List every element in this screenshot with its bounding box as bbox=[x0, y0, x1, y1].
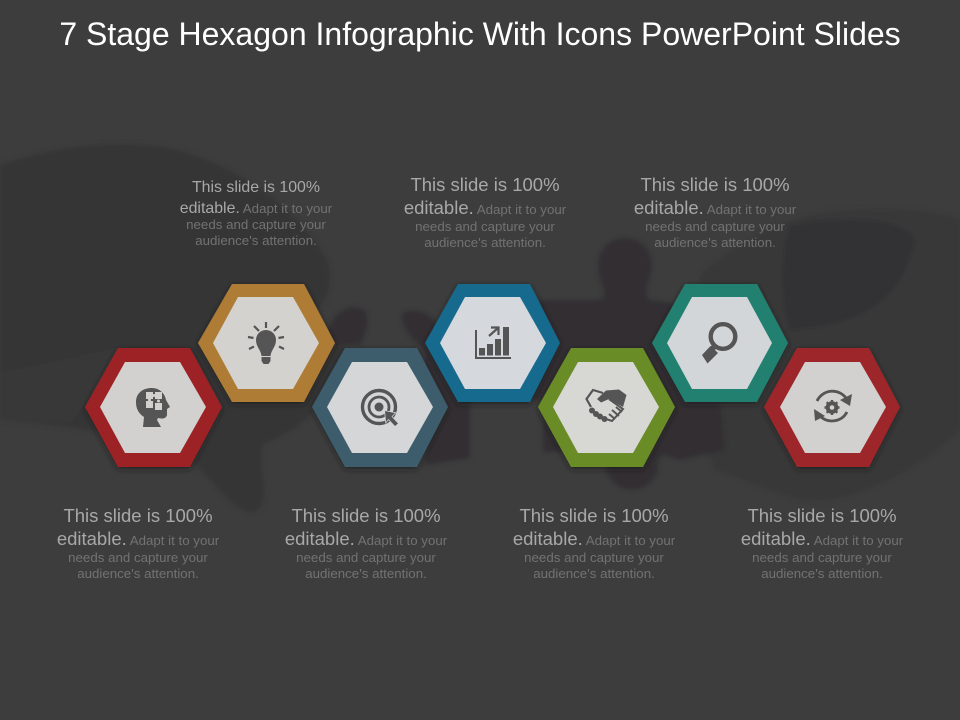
text block: bottom 1: needs and capture your bbox=[68, 550, 208, 565]
text block: top left bbox=[180, 179, 332, 248]
text block: top right: This slide is 100% bbox=[640, 174, 790, 195]
text block: top left: audience's attention. bbox=[195, 233, 317, 248]
text block: top center: needs and capture your bbox=[415, 219, 555, 234]
text block: top right: audience's attention. bbox=[654, 235, 776, 250]
text block: bottom 3: editable. Adapt it to your bbox=[513, 528, 675, 549]
icon: magnifying glass bbox=[702, 324, 735, 364]
text block: bottom 3: audience's attention. bbox=[533, 566, 655, 581]
text block: bottom 1: This slide is 100% bbox=[63, 505, 213, 526]
text block: top right bbox=[634, 174, 796, 250]
text block: top left: This slide is 100% bbox=[192, 179, 320, 196]
text block: top center bbox=[404, 174, 566, 250]
text block: top center: This slide is 100% bbox=[410, 174, 560, 195]
icon: light bulb bbox=[248, 322, 284, 364]
text block: top center: editable. Adapt it to your bbox=[404, 197, 566, 218]
icon: head with puzzle brain bbox=[136, 388, 170, 427]
text block: bottom 3: needs and capture your bbox=[524, 550, 664, 565]
text block: bottom 4: needs and capture your bbox=[752, 550, 892, 565]
hexagon 4: blue chart bbox=[425, 284, 560, 402]
text block: top right: needs and capture your bbox=[645, 219, 785, 234]
hexagon 3: slate target bbox=[312, 348, 448, 467]
text block: bottom 2: needs and capture your bbox=[296, 550, 436, 565]
text block: bottom 1: audience's attention. bbox=[77, 566, 199, 581]
text block: bottom 4: audience's attention. bbox=[761, 566, 883, 581]
title: 7 Stage Hexagon Infographic With Icons PowerPoint Slides bbox=[59, 16, 901, 52]
hexagon 2: orange bulb bbox=[198, 284, 335, 402]
text block: bottom 4 bbox=[741, 505, 903, 581]
icon: rising bar chart bbox=[475, 327, 511, 359]
text block: bottom 4: This slide is 100% bbox=[747, 505, 897, 526]
icon: handshake bbox=[586, 390, 626, 422]
text block: bottom 2: This slide is 100% bbox=[291, 505, 441, 526]
text block: top left: editable. Adapt it to your bbox=[180, 200, 332, 217]
text block: bottom 2: editable. Adapt it to your bbox=[285, 528, 447, 549]
hexagon 1: red brain bbox=[85, 348, 222, 467]
icon: gear with circular arrows bbox=[814, 391, 852, 421]
text block: bottom 3: This slide is 100% bbox=[519, 505, 669, 526]
hexagon 5: green handshake bbox=[538, 348, 675, 467]
text block: bottom 2: audience's attention. bbox=[305, 566, 427, 581]
text block: bottom 4: editable. Adapt it to your bbox=[741, 528, 903, 549]
text block: bottom 1 bbox=[57, 505, 219, 581]
hexagon 7: red refresh gear bbox=[764, 348, 900, 467]
hexagon 6: teal magnifier bbox=[652, 284, 788, 402]
text block: bottom 1: editable. Adapt it to your bbox=[57, 528, 219, 549]
text block: bottom 3 bbox=[513, 505, 675, 581]
text block: bottom 2 bbox=[285, 505, 447, 581]
text block: top left: needs and capture your bbox=[186, 217, 326, 232]
text block: top right: editable. Adapt it to your bbox=[634, 197, 796, 218]
text block: top center: audience's attention. bbox=[424, 235, 546, 250]
icon: target with cursor bbox=[362, 390, 398, 426]
